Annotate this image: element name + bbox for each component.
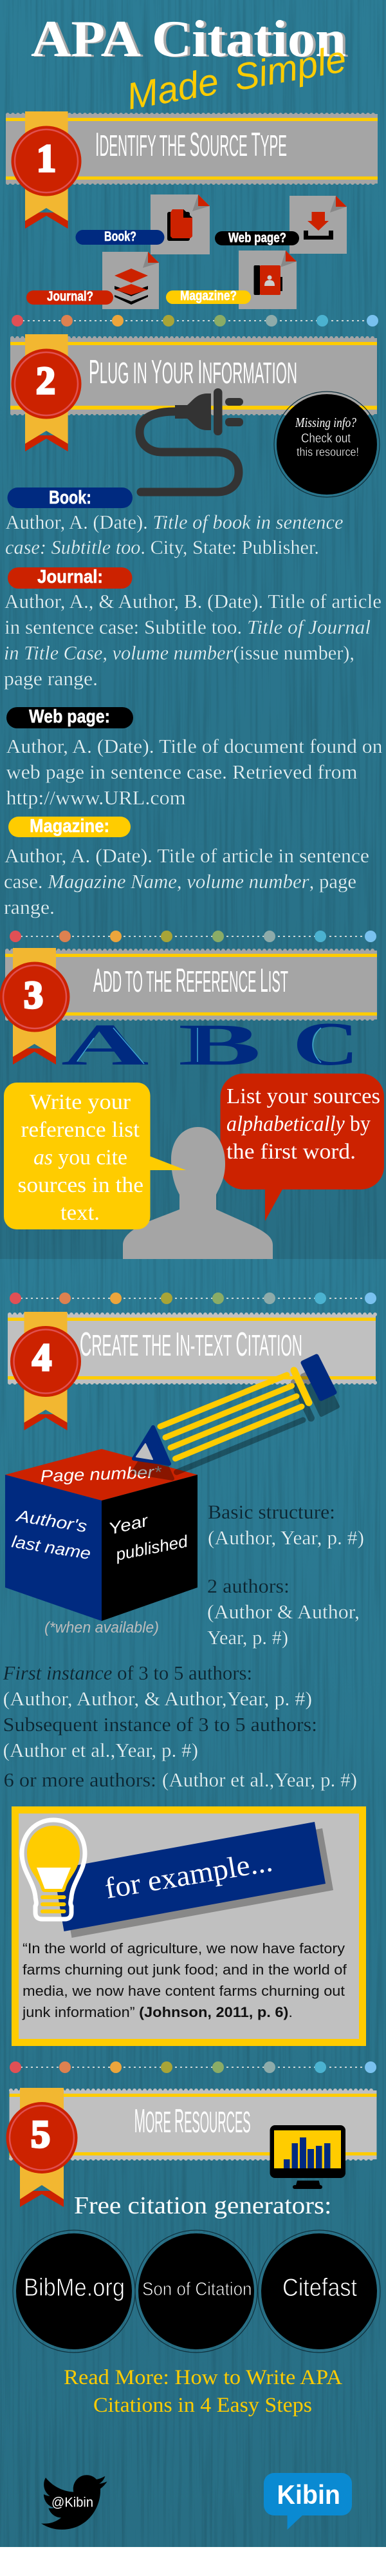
text: example quotation: junk information” (Johnson, 2011, p. 6) . [22, 2004, 293, 2020]
callout: yellow speech bubble: as you cite [33, 1146, 127, 1170]
link text: read more: Citations in 4 Easy Steps [93, 2394, 312, 2417]
circle: BibMe.org [13, 2230, 135, 2353]
callout: red speech bubble [220, 1074, 384, 1221]
label: Book? pill [76, 229, 165, 245]
text: year published: published [113, 1531, 190, 1564]
text: red bubble message: alphabetically by [226, 1112, 371, 1136]
text: example quotation [22, 1940, 347, 2020]
text: three to five authors rules: (Author, Author, & Author,Year, p. #) [3, 1687, 312, 1710]
icon: pencil [133, 1356, 338, 1479]
text: six or more authors: (Author et al.,Year, p. #) [162, 1768, 357, 1791]
badge: step 5 ribbon: 5 [31, 2113, 50, 2155]
badge: step 1 ribbon [12, 111, 81, 229]
logo: Kibin speech bubble [264, 2473, 352, 2530]
icon: person silhouette [123, 1127, 273, 1259]
label: Journal? pill [26, 289, 113, 305]
text: two authors: Year, p. #) [207, 1626, 288, 1649]
badge: step 4 ribbon: 4 [32, 1336, 51, 1379]
text: web page citation format: http://www.URL.com [6, 786, 186, 809]
panel: step 3 banner [5, 951, 377, 1019]
text: book citation format [5, 511, 344, 558]
label: Book? pill: Book? [104, 229, 136, 244]
timeline dots row 4 [10, 2061, 376, 2073]
label: Magazine? pill: Magazine? [180, 289, 237, 303]
panel: example box [12, 1806, 366, 2046]
timeline dots row 1 [12, 315, 378, 327]
text: two authors [207, 1575, 360, 1649]
text: three to five authors rules: First instance of 3 to 5 authors: [3, 1662, 252, 1684]
banner: for example: for example... [102, 1844, 275, 1905]
badge: step 5 ribbon [6, 2088, 77, 2207]
text: magazine citation format: Author, A. (Date). Title of article in sentence [5, 844, 369, 867]
label: Journal pill: Journal: [37, 567, 103, 587]
badge: step 2 ribbon [12, 334, 81, 451]
label: Web page? pill: Web page? [228, 231, 286, 245]
icon: twitter bird with handle [41, 2475, 107, 2530]
badge: step 2 ribbon: 2 [36, 359, 55, 402]
logo: Kibin speech bubble: Kibin [277, 2479, 340, 2510]
heading: identify the source type: IDENTIFY THE SOURCE TYPE [95, 126, 287, 164]
decorative letters: A B C [61, 1009, 359, 1078]
banner shadow [61, 1828, 333, 1938]
text: journal citation format: Author, A., & Author, B. (Date). Title of article [5, 590, 381, 612]
icon: monitor with bar chart [270, 2125, 345, 2189]
text: page number: Page number * [40, 1462, 162, 1486]
circle: Citefast: Citefast [282, 2274, 357, 2302]
callout: yellow speech bubble: Write your [30, 1090, 131, 1114]
icon: twitter bird with handle: @Kibin [51, 2495, 93, 2510]
decorative letters: A B C: B [178, 1012, 261, 1077]
text: two authors: 2 authors: [207, 1575, 290, 1597]
decorative letters: A B C: A [61, 1012, 149, 1077]
text: red bubble message: List your sources [226, 1084, 380, 1108]
link text: read more [64, 2366, 342, 2417]
text: two authors: (Author & Author, [207, 1600, 360, 1623]
text: basic structure: Basic structure: [208, 1501, 335, 1523]
circle: Son of Citation: Son of Citation [142, 2279, 252, 2300]
text: example quotation: farms churning out junk food; and in the world of [23, 1962, 347, 1978]
callout: missing info circle [274, 392, 380, 497]
callout: missing info circle: this resource! [297, 446, 359, 459]
text: magazine citation format [4, 844, 369, 918]
timeline dots row 3 [10, 1293, 376, 1304]
label: Book pill [8, 488, 133, 508]
text: basic structure [208, 1501, 364, 1549]
text: journal citation format: in sentence case: Subtitle too. Title of Journal [5, 616, 371, 638]
text: journal citation format: page range. [4, 667, 98, 690]
pencil shadow [133, 1368, 338, 1479]
link text: read more: Read More: How to Write APA [64, 2366, 342, 2389]
callout: yellow speech bubble: sources in the [18, 1173, 143, 1197]
text: red bubble message [226, 1084, 380, 1164]
label: Journal? pill: Journal? [47, 289, 93, 304]
heading: add to the reference list: ADD TO THE REFERENCE LIST [93, 962, 288, 999]
note: when available: (*when available) [44, 1619, 159, 1636]
text: journal citation format: in Title Case, volume number(issue number), [4, 641, 354, 664]
panel: step 5 banner [9, 2090, 377, 2159]
text: three to five authors rules: (Author et al.,Year, p. #) [3, 1739, 198, 1761]
icon: light bulb [22, 1820, 85, 1919]
circle: BibMe.org: BibMe.org [24, 2274, 125, 2302]
text: red bubble message: the first word. [226, 1140, 356, 1164]
text: three to five authors rules: Subsequent instance of 3 to 5 authors: [3, 1713, 317, 1736]
badge: step 3 ribbon [0, 948, 69, 1065]
heading: more resources: MORE RESOURCES [134, 2103, 251, 2140]
text: year published: Year [107, 1510, 151, 1539]
text: magazine citation format: case. Magazine Name, volume number, page [4, 870, 356, 893]
title: APA Citation [33, 12, 349, 68]
text: six or more authors [4, 1768, 357, 1791]
heading: create the in-text citation: CREATE THE IN-TEXT CITATION [80, 1326, 302, 1363]
callout: yellow speech bubble: reference list [21, 1118, 140, 1142]
timeline dots row 2 [10, 931, 376, 942]
decorative letters: A B C: C [293, 1009, 359, 1078]
diagram: citation cube [5, 1449, 198, 1621]
label: Magazine pill: Magazine: [30, 816, 109, 837]
text: book citation format: Author, A. (Date). Title of book in sentence [5, 511, 344, 533]
text: web page citation format: web page in sentence case. Retrieved from [6, 761, 358, 783]
label: Web page pill [6, 706, 133, 728]
label: Book pill: Book: [49, 488, 91, 508]
panel: step 4 banner [8, 1314, 376, 1383]
badge: step 4 ribbon [10, 1312, 81, 1430]
panel: step 2 banner [10, 338, 377, 414]
subtitle: Made Simple: Made Simple [124, 38, 349, 118]
icon: plug and cord [140, 388, 243, 492]
panel: step 1 banner [6, 114, 378, 184]
text: author's last name [10, 1506, 92, 1563]
text: journal citation format [4, 590, 381, 690]
callout: yellow speech bubble [4, 1083, 186, 1229]
text: author's last name: last name [10, 1531, 92, 1563]
heading: free citation generators: Free citation generators: [74, 2192, 332, 2219]
badge: step 3 ribbon: 3 [24, 974, 43, 1016]
text: example quotation: media, we now have content farms churning out [23, 1983, 345, 1999]
icon: magazine document [239, 251, 297, 309]
text: year published [107, 1510, 190, 1564]
text: book citation format: case: Subtitle too. City, State: Publisher. [5, 536, 319, 558]
text: basic structure: (Author, Year, p. #) [208, 1526, 364, 1549]
circle: Citefast [258, 2230, 380, 2353]
icon: web page document [290, 196, 347, 254]
badge: step 1 ribbon: 1 [37, 137, 56, 180]
callout: missing info circle: Missing info? [295, 415, 356, 430]
text: author's last name: Author's [14, 1506, 88, 1536]
circle: Son of Citation [135, 2230, 257, 2353]
text: magazine citation format: range. [4, 896, 55, 918]
banner: for example [53, 1822, 326, 1931]
label: Journal pill [8, 567, 133, 589]
text: six or more authors: 6 or more authors: [4, 1768, 156, 1791]
text: three to five authors rules [3, 1662, 317, 1761]
title: APA Citation [31, 11, 346, 68]
text: web page citation format: Author, A. (Date). Title of document found on [6, 735, 383, 757]
icon: journal document [102, 252, 159, 309]
icon: book document [151, 194, 210, 254]
text: example quotation: “In the world of agriculture, we now have factory [23, 1940, 345, 1956]
callout: yellow speech bubble: text. [60, 1201, 100, 1225]
callout: missing info circle: Check out [301, 431, 351, 446]
text: web page citation format [6, 735, 383, 809]
label: Web page pill: Web page: [29, 706, 110, 727]
